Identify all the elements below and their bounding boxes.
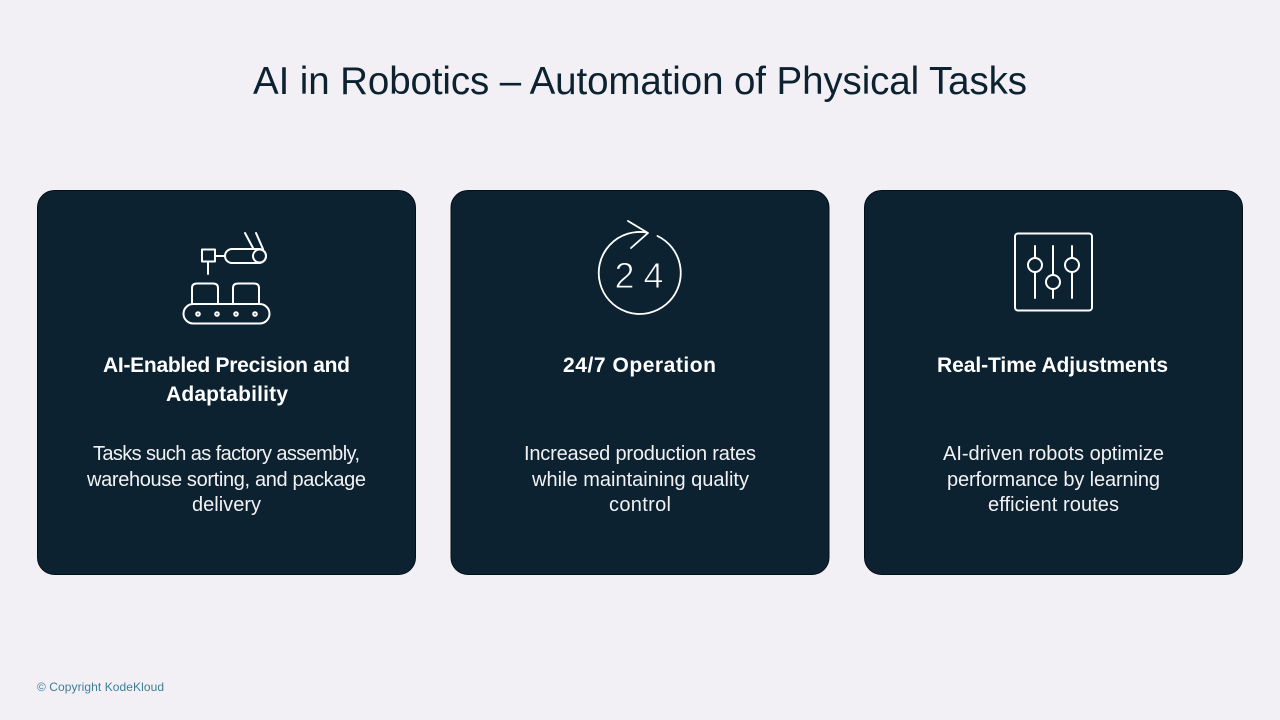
text: optimization description: [943, 443, 1164, 516]
title: AI in Robotics – Automation of Physical Tasks: [253, 60, 1027, 103]
text: tasks description: warehouse sorting, and package: [86, 469, 366, 491]
text: production description: Increased production rates: [524, 443, 756, 465]
heading: AI-enabled precision and adaptability: Adaptability: [166, 383, 288, 406]
heading: real-time adjustments: Real-Time Adjustments: [937, 354, 1168, 377]
icon: 24 hour cycle: 4: [644, 255, 664, 296]
icon: sliders: [1015, 234, 1092, 310]
icon: 24 hour cycle: 2: [614, 255, 635, 296]
icon: robot arm over conveyor: [184, 233, 270, 324]
text: tasks description: Tasks such as factory assembly,: [93, 443, 360, 465]
heading: AI-enabled precision and adaptability: [103, 354, 350, 406]
text: production description: while maintaining quality: [531, 469, 749, 491]
icon: 24 hour cycle: [599, 221, 681, 314]
copyright footer: © Copyright KodeKloud: [37, 680, 164, 694]
text: production description: [524, 443, 756, 516]
heading: 24/7 operation: 24/7 Operation: [563, 354, 716, 377]
panel: real-time adjustments: [864, 190, 1242, 574]
text: tasks description: [86, 443, 366, 516]
text: optimization description: performance by learning: [947, 469, 1160, 491]
heading: AI-enabled precision and adaptability: AI-Enabled Precision and: [103, 354, 350, 377]
panel: AI-enabled precision: [38, 190, 416, 574]
text: optimization description: AI-driven robots optimize: [943, 443, 1164, 465]
text: optimization description: efficient routes: [988, 494, 1119, 516]
panel: 24/7 operation: [451, 190, 829, 574]
text: production description: control: [609, 494, 671, 516]
text: tasks description: delivery: [192, 494, 261, 516]
